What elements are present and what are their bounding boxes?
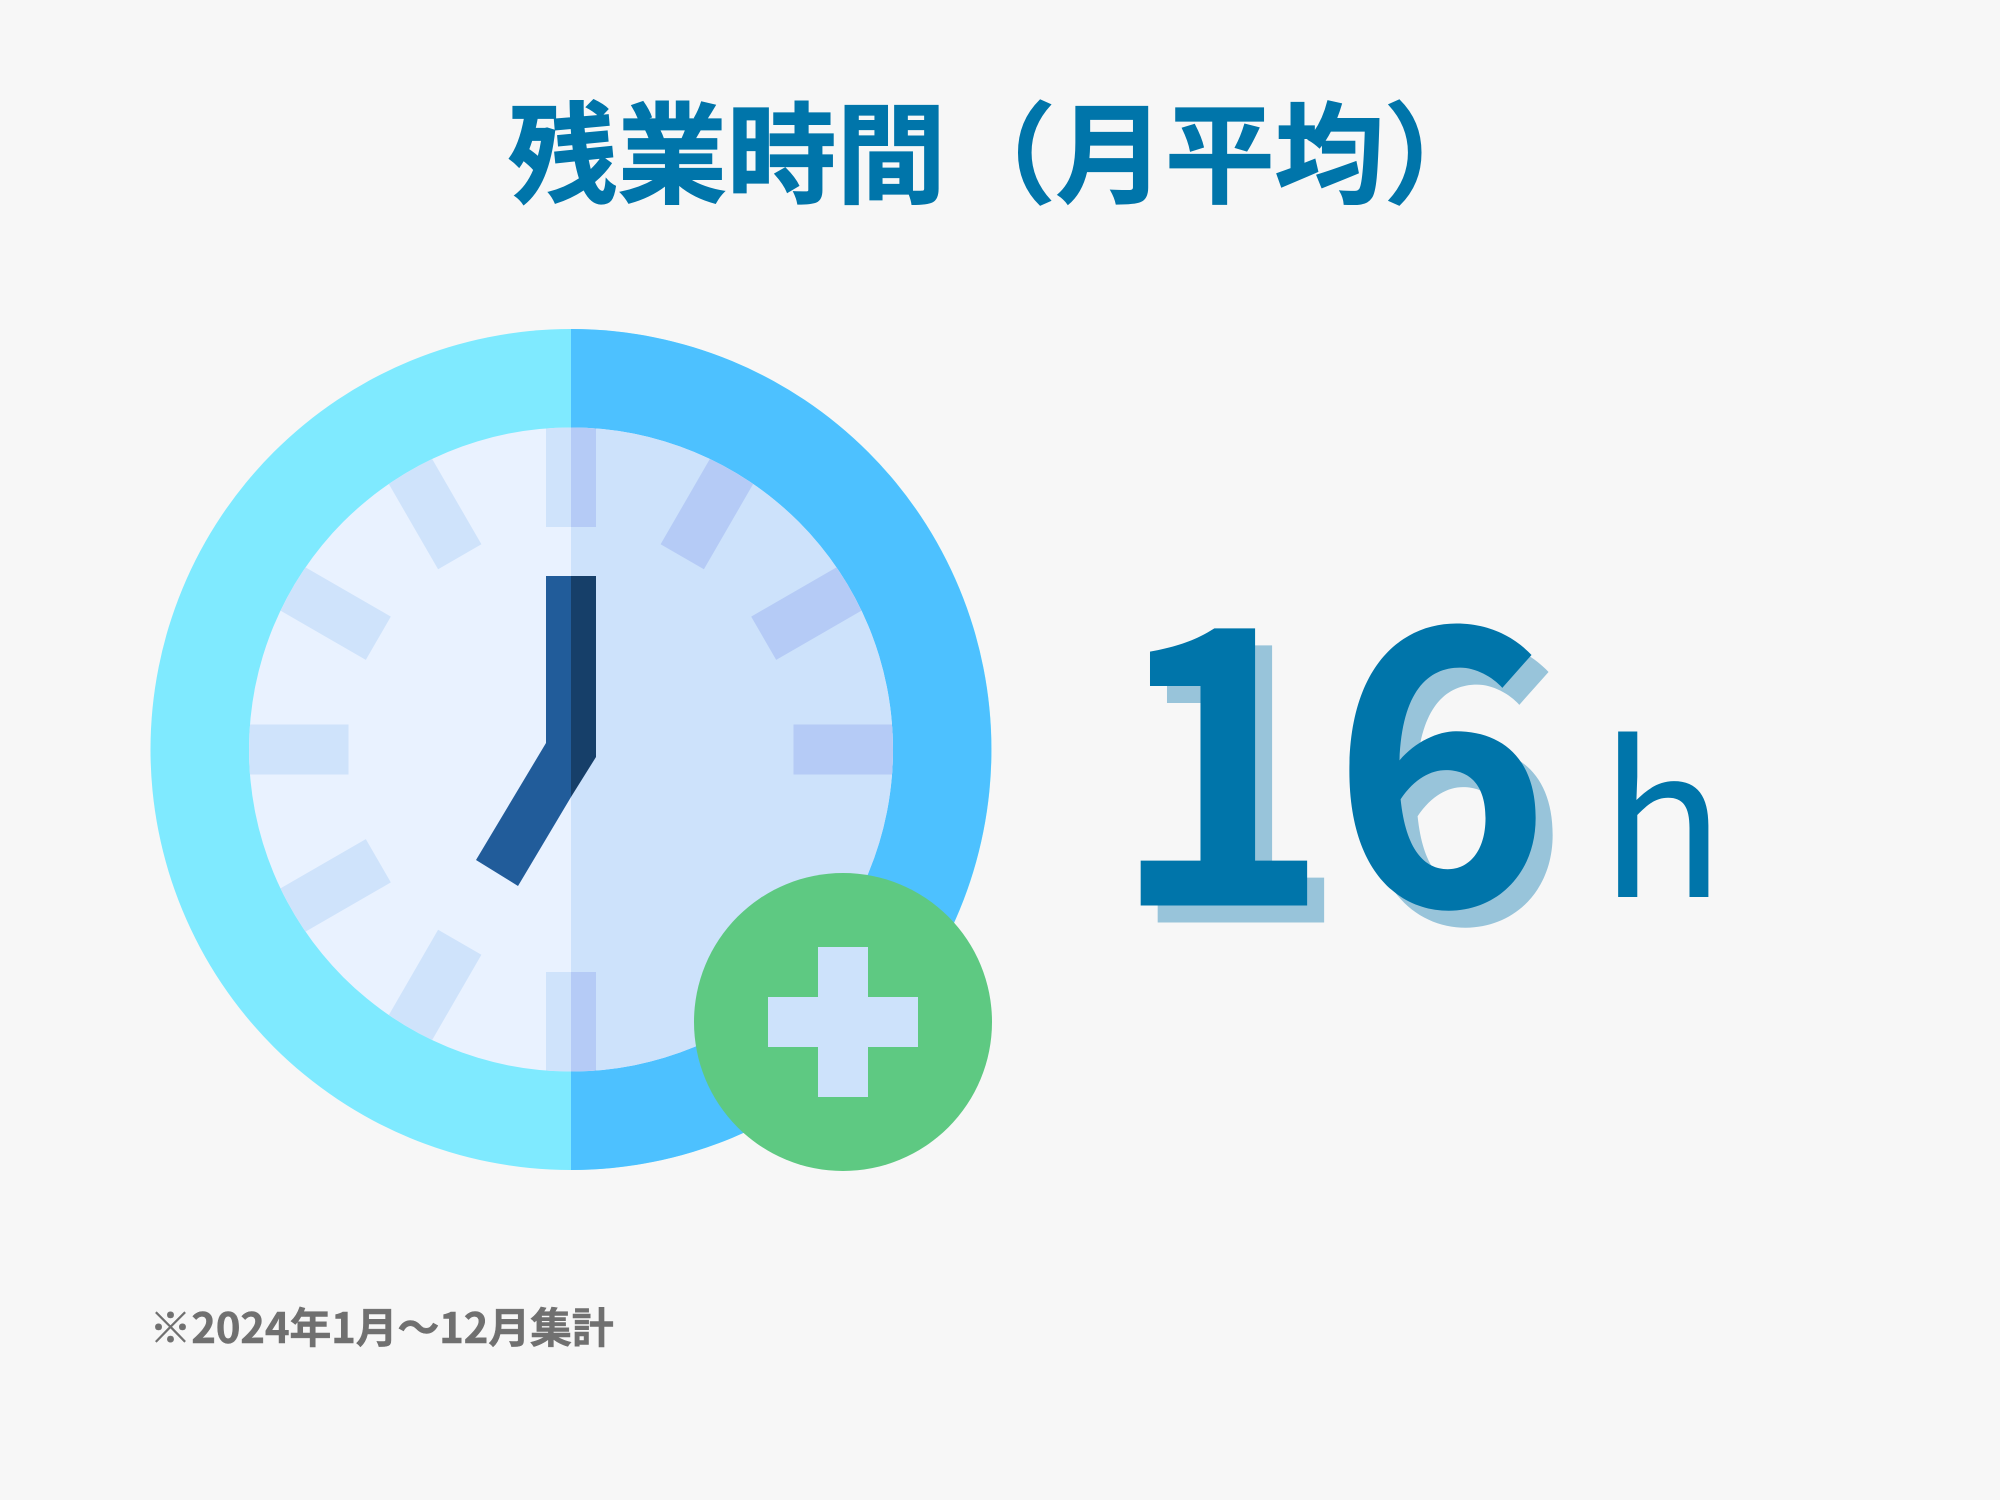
value: 16 hours bbox=[1110, 472, 1725, 1030]
clock outer ring bbox=[150, 329, 992, 1170]
number: 16 bbox=[1110, 472, 1551, 1014]
hour ticks bbox=[242, 420, 900, 1079]
footnote: ※2024年1月〜12月集計 bbox=[150, 1295, 614, 1356]
unit: h bbox=[1599, 656, 1725, 957]
number shadow: 16 bbox=[1127, 488, 1568, 1030]
title: 残業時間（月平均） bbox=[508, 68, 1494, 226]
clock face bbox=[249, 428, 893, 1072]
icon: plus badge bbox=[694, 873, 992, 1171]
clock hands bbox=[476, 576, 596, 886]
icon: clock with plus badge bbox=[150, 329, 992, 1171]
